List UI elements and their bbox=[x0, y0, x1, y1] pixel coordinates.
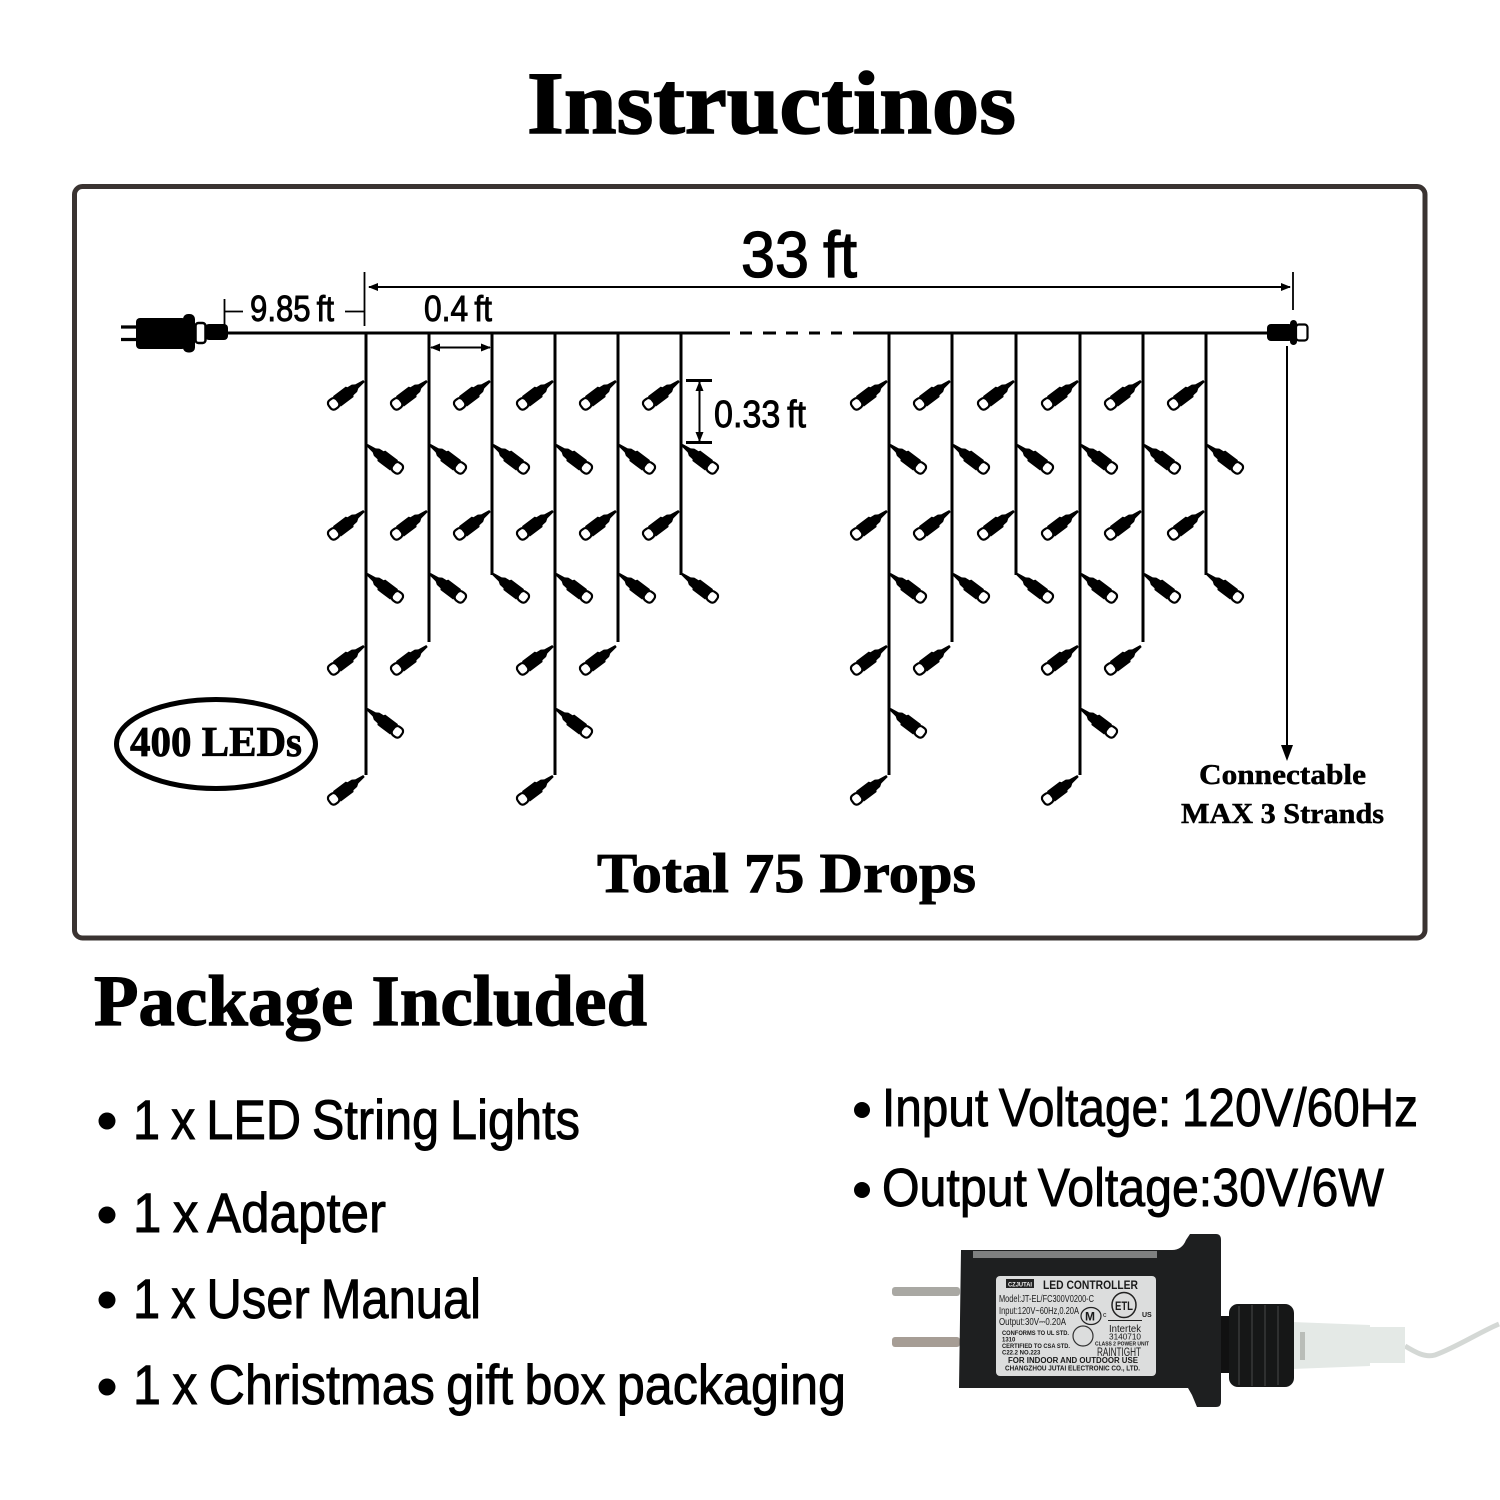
caption: total drops: Total 75 Drops bbox=[597, 843, 976, 905]
dimension: 33 ft bbox=[364, 218, 1293, 326]
list: package contents: 1 x Christmas gift box packaging bbox=[133, 1353, 846, 1416]
product label: Model:JT-EL/FC300V0200-C bbox=[999, 1294, 1094, 1305]
badge: 400 LEDs: 400 LEDs bbox=[130, 720, 302, 766]
icon: input plug bbox=[121, 314, 228, 352]
product label: LED CONTROLLER bbox=[1043, 1278, 1138, 1292]
translucent connector bbox=[1292, 1322, 1405, 1369]
dimension: 0.4 ft drop spacing bbox=[424, 288, 492, 348]
knob bbox=[1229, 1304, 1294, 1387]
dimension: 0.33 ft bulb spacing bbox=[686, 380, 806, 442]
list: voltage specs bbox=[854, 1078, 1418, 1218]
panel frame bbox=[74, 186, 1425, 938]
title: Instructinos bbox=[527, 55, 1016, 153]
product label: Input:120V~60Hz,0.20A bbox=[999, 1306, 1079, 1317]
product label: Output:30V⎓0.20A bbox=[999, 1317, 1066, 1328]
top sticker bbox=[973, 1251, 1157, 1258]
list: package contents: 1 x User Manual bbox=[133, 1267, 481, 1330]
product label: ETL bbox=[1115, 1299, 1133, 1313]
product label: Intertek bbox=[1109, 1324, 1142, 1335]
product label: CONFORMS TO UL STD. bbox=[1002, 1331, 1069, 1337]
wires bbox=[1405, 1324, 1499, 1356]
list: voltage specs: Output Voltage:30V/6W bbox=[882, 1158, 1384, 1218]
product label: CERTIFIED TO CSA STD. bbox=[1002, 1344, 1070, 1350]
product label: US bbox=[1142, 1312, 1152, 1319]
list: package contents bbox=[98, 1088, 846, 1416]
prongs bbox=[892, 1287, 960, 1347]
dimension: 0.4 ft drop spacing: 0.4 ft bbox=[424, 288, 492, 329]
product label: C22.2 NO.223 bbox=[1002, 1350, 1041, 1356]
list: package contents: 1 x LED String Lights bbox=[133, 1088, 580, 1151]
note: connectable: MAX 3 Strands bbox=[1181, 798, 1384, 830]
product label: FOR INDOOR AND OUTDOOR USE bbox=[1008, 1356, 1139, 1365]
adapter body bbox=[959, 1234, 1221, 1407]
note: connectable: Connectable bbox=[1199, 759, 1366, 791]
adapter photo illustration bbox=[892, 1234, 1499, 1407]
product label: M bbox=[1085, 1310, 1095, 1324]
dimension: 0.33 ft bulb spacing: 0.33 ft bbox=[714, 394, 806, 436]
product label: c bbox=[1103, 1312, 1107, 1319]
main wire bbox=[228, 332, 1268, 334]
dimension: 9.85 ft lead wire: 9.85 ft bbox=[250, 288, 334, 329]
connector inner edge bbox=[1300, 1332, 1305, 1360]
icon: end connector socket bbox=[1267, 320, 1308, 345]
panel: light string diagram bbox=[74, 186, 1425, 938]
product label: 3140710 bbox=[1109, 1332, 1142, 1342]
drop wires bbox=[366, 333, 1206, 775]
note: connectable bbox=[1181, 759, 1384, 830]
neck bbox=[1221, 1316, 1237, 1373]
product label: CHANGZHOU JUTAI ELECTRONIC CO., LTD. bbox=[1005, 1366, 1140, 1372]
dimension: 33 ft: 33 ft bbox=[741, 218, 857, 291]
product label bbox=[996, 1276, 1156, 1376]
product label: CLASS 2 POWER UNIT bbox=[1095, 1342, 1150, 1348]
arrow: connectable bbox=[1281, 346, 1293, 761]
badge: 400 LEDs bbox=[116, 700, 316, 788]
heading: package included: Package Included bbox=[94, 961, 647, 1041]
left group bulbs bbox=[326, 376, 720, 807]
right group bulbs bbox=[849, 376, 1245, 807]
list: package contents: 1 x Adapter bbox=[133, 1181, 386, 1244]
product label: CZJUTAI bbox=[1008, 1282, 1032, 1288]
product label: 1310 bbox=[1002, 1338, 1016, 1344]
dimension: 9.85 ft lead wire bbox=[224, 288, 364, 329]
product label: RAINTIGHT bbox=[1097, 1345, 1141, 1359]
list: voltage specs: Input Voltage: 120V/60Hz bbox=[882, 1078, 1418, 1138]
